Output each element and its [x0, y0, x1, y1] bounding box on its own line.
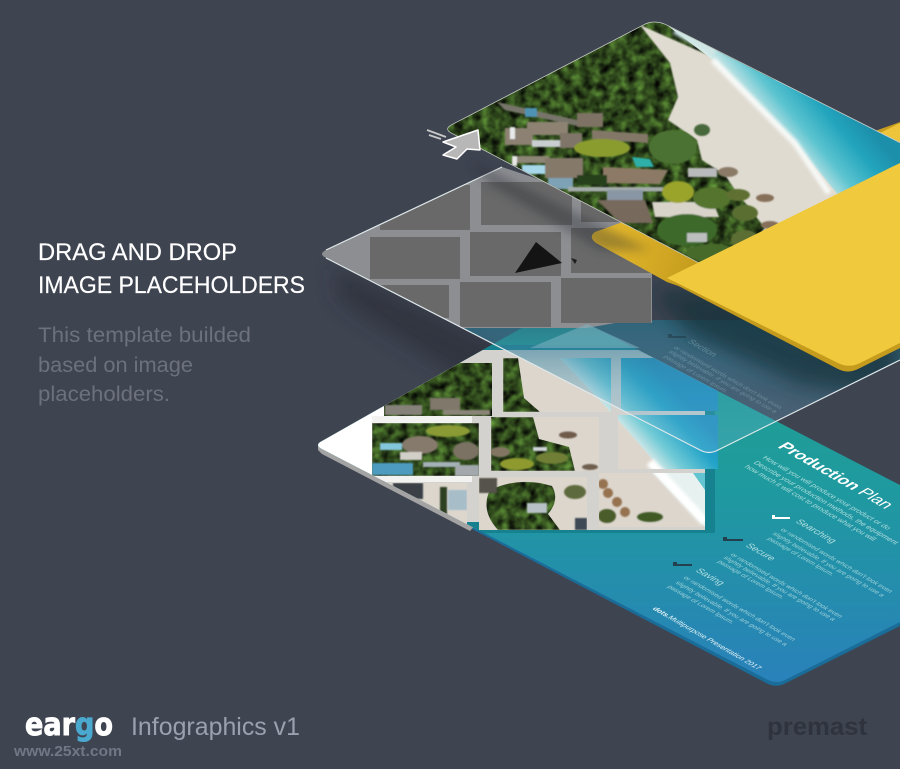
logo: eargo: eargo [25, 707, 113, 743]
placeholder gutters [385, 350, 705, 530]
gray glass area [322, 167, 652, 328]
item: Searching: Searching [792, 518, 839, 545]
slide copy: Production Plan [650, 440, 900, 671]
faded card copy seen through glass: Section [685, 338, 720, 358]
card thickness edge [470, 520, 900, 686]
description text: based on image [38, 354, 193, 377]
item: Searching: or randomised words which don't look even [778, 528, 894, 594]
jungle [445, 20, 775, 270]
glass tint [464, 320, 900, 452]
description text: This template builded [38, 324, 251, 347]
logo: premast: premast [767, 713, 868, 741]
small drop icon [571, 258, 577, 264]
beach photo in placeholders [370, 350, 720, 535]
watermark: www.25xt.com [13, 743, 122, 760]
faded card copy seen through glass: or randomised words which don't look even [671, 346, 784, 410]
faded card copy seen through glass: slightly believable. If you are going to use a [666, 350, 779, 414]
title: Production Plan [774, 440, 898, 511]
card face gradient [318, 327, 900, 682]
item: Searching: passage of Lorem Ipsum. [765, 537, 836, 577]
icon: check saving [673, 562, 692, 566]
intro paragraph: how much it will cost to produce what you will [742, 464, 879, 542]
yellow card front [667, 163, 900, 372]
glass edge [326, 167, 900, 452]
glass slide shadow [335, 268, 520, 385]
white slide area [318, 356, 472, 525]
intro paragraph: How will you will produce your product or do [760, 455, 893, 531]
yellow card cast shadow [650, 290, 900, 400]
glass slide: translucent middle layer [322, 166, 900, 454]
item: Searching: slightly believable. If you are going to use a [770, 532, 886, 598]
item: Saving: Saving [692, 567, 727, 587]
black triangle photo fragment [515, 242, 562, 273]
description text [38, 324, 251, 406]
item: Saving: passage of Lorem Ipsum. [665, 585, 736, 625]
empty placeholders [370, 180, 651, 327]
top photo card [447, 22, 900, 263]
icon: check secure [723, 537, 743, 541]
sand base [372, 358, 718, 524]
item: Secure: Secure [742, 542, 778, 563]
item: Secure: or randomised words which don't look even [728, 553, 844, 619]
footer title: Infographics v1 [131, 713, 300, 741]
ocean [560, 358, 718, 469]
ocean [668, 26, 900, 197]
item: Secure: passage of Lorem Ipsum. [715, 560, 786, 600]
bottom slide: teal card with photo placeholders [318, 327, 900, 686]
item: Secure: slightly believable. If you are going to use a [721, 556, 837, 622]
heading: IMAGE PLACEHOLDERS [38, 272, 305, 299]
photo card shadow [470, 160, 650, 250]
jungle [384, 363, 496, 418]
item: Saving: or randomised words which don't look even [681, 576, 797, 642]
footer line: dots.Multipurpose Presentation 2017 [650, 606, 764, 671]
placeholder shadow [467, 345, 715, 533]
sand [640, 26, 838, 232]
huts and pools [385, 405, 422, 415]
icon: check searching [772, 515, 790, 519]
description text: placeholders. [38, 383, 170, 406]
heading: DRAG AND DROP [38, 239, 237, 266]
beach umbrellas and palms [598, 479, 608, 489]
heading [38, 239, 305, 299]
sand patches and huts [497, 102, 779, 262]
intro paragraph: Describe your production methods, the equipment [751, 460, 900, 546]
item: Saving: slightly believable. If you are going to use a [673, 581, 789, 647]
icon: drag cursor [427, 130, 480, 159]
faded card copy seen through glass: passage of Lorem Ipsum. [661, 355, 730, 394]
yellow card back [592, 122, 900, 290]
